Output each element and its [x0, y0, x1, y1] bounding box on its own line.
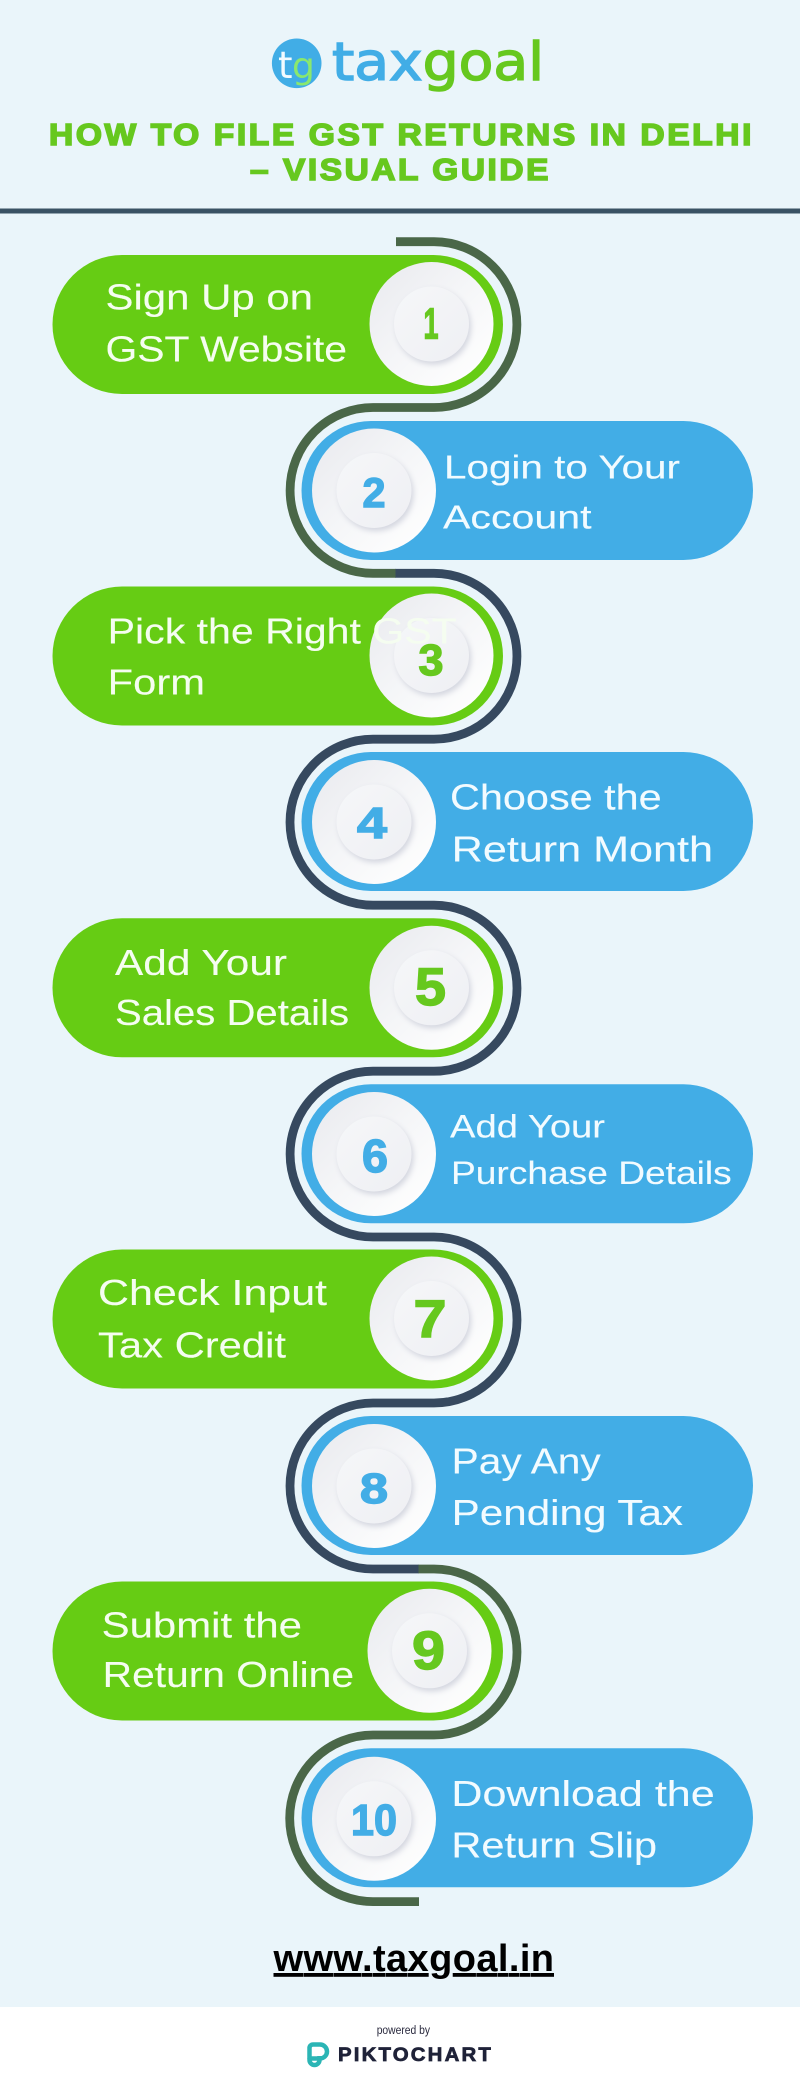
text: Pay Any Pending Tax: Pending Tax: [452, 1492, 683, 1533]
connector path: [290, 242, 517, 1902]
number 5: 5: [415, 958, 446, 1017]
step 2: [302, 421, 753, 560]
number 1: 1: [424, 300, 438, 348]
text: Pick the Right GST Form: [108, 610, 457, 702]
text: Check Input Tax Credit: Check Input: [98, 1272, 327, 1313]
text: Login to Your Account: Login to Your: [444, 448, 680, 485]
logo: taxgoal: [272, 32, 544, 93]
text: Choose the Return Month: [450, 776, 713, 870]
number 6: 6: [362, 1130, 388, 1182]
text: Add Your Purchase Details: Purchase Details: [451, 1155, 732, 1191]
icon: tg badge: t: [278, 44, 293, 87]
header divider: [0, 208, 800, 214]
text: Login to Your Account: Account: [443, 498, 592, 535]
step 1: [52, 255, 503, 394]
text: Download the Return Slip: [451, 1773, 715, 1866]
step 10: [302, 1748, 753, 1887]
text: Sign Up on GST Website: [106, 276, 347, 370]
text: Choose the Return Month: Return Month: [452, 829, 713, 870]
connector segment: steps 9-10: [290, 1569, 517, 1902]
text: Download the Return Slip: Download the: [451, 1773, 715, 1814]
icon: Piktochart logo: [310, 2044, 327, 2065]
text: Add Your Sales Details: Add Your: [115, 942, 287, 983]
number 8: 8: [360, 1465, 388, 1513]
wordmark: taxgoal: [332, 32, 544, 93]
Piktochart wordmark: PIKTOCHART: [338, 2045, 493, 2066]
text: Submit the Return Online: [102, 1604, 354, 1695]
step 6: [302, 1084, 753, 1223]
step 7: [52, 1250, 503, 1388]
step 4: [302, 752, 753, 891]
text: Check Input Tax Credit: [98, 1272, 327, 1365]
title: – VISUAL GUIDE: [250, 152, 551, 187]
step 3: [52, 586, 503, 726]
text: Submit the Return Online: Submit the: [102, 1604, 302, 1645]
step 5: [52, 918, 503, 1057]
text: Sign Up on GST Website: Sign Up on: [106, 276, 313, 317]
icon: tg badge: [272, 38, 322, 88]
text: Add Your Sales Details: Sales Details: [115, 992, 349, 1033]
number 10: 10: [351, 1796, 397, 1845]
number 9: 9: [412, 1621, 445, 1681]
number 3: 3: [418, 636, 444, 685]
text: Pick the Right GST Form: Pick the Right GST: [108, 610, 457, 651]
text: Add Your Purchase Details: [450, 1108, 732, 1191]
text: Sign Up on GST Website: GST Website: [106, 329, 347, 370]
text: Add Your Purchase Details: Add Your: [450, 1108, 605, 1144]
connector segment: steps 1-2: [290, 242, 517, 573]
website link: www.taxgoal.in: [272, 1938, 554, 1980]
icon: tg badge: g: [292, 46, 315, 87]
footer band: [0, 2007, 800, 2087]
text: Pay Any Pending Tax: Pay Any: [452, 1440, 601, 1481]
text: Pay Any Pending Tax: [452, 1440, 683, 1533]
number 4: 4: [357, 799, 388, 848]
number 7: 7: [414, 1290, 446, 1349]
powered by text: powered by: [377, 2025, 430, 2037]
text: Pick the Right GST Form: Form: [108, 661, 205, 702]
title: [49, 117, 754, 187]
step 8: [302, 1416, 753, 1555]
number 2: 2: [362, 469, 386, 516]
text: Login to Your Account: [443, 448, 680, 535]
connector segment: steps 3-8: [290, 573, 517, 1569]
text: Check Input Tax Credit: Tax Credit: [98, 1324, 286, 1365]
text: Add Your Sales Details: [115, 942, 349, 1033]
text: Submit the Return Online: Return Online: [103, 1654, 354, 1695]
text: Download the Return Slip: Return Slip: [451, 1824, 657, 1866]
text: Choose the Return Month: Choose the: [450, 776, 662, 817]
step 9: [52, 1582, 503, 1720]
title: HOW TO FILE GST RETURNS IN DELHI: [49, 117, 754, 152]
